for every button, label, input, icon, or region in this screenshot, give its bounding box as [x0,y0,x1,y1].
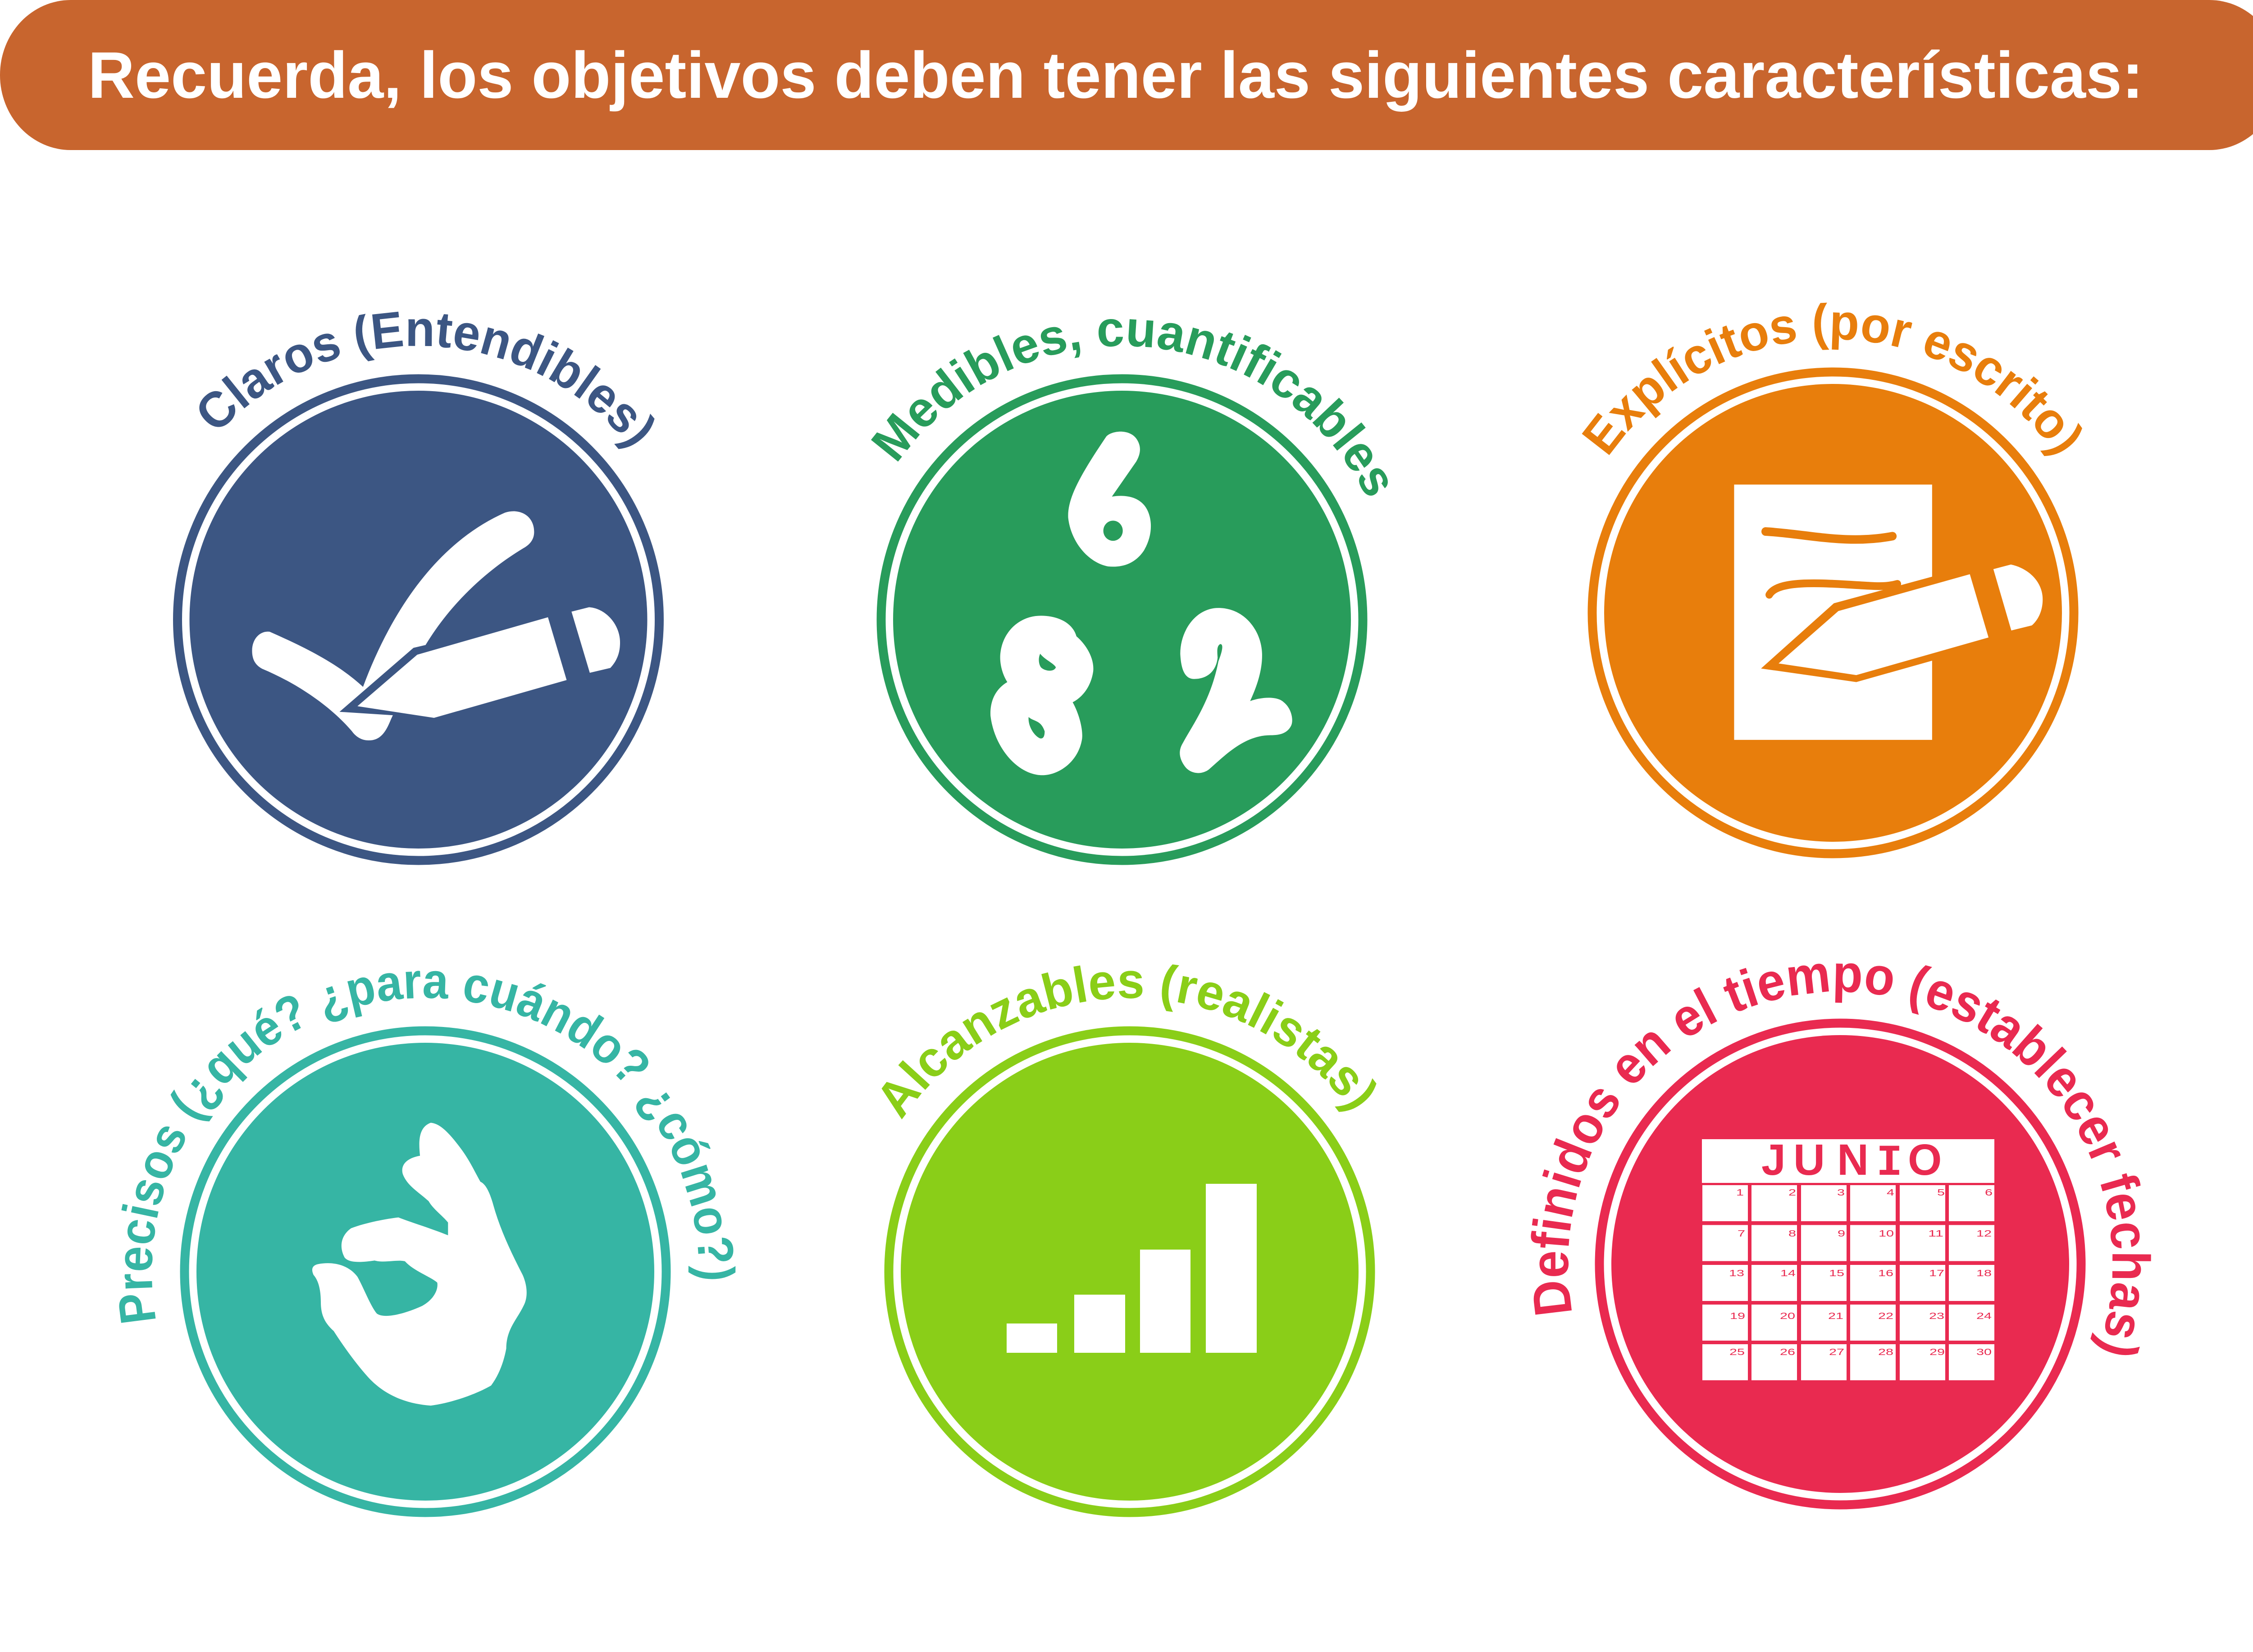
title banner: Recuerda, los objetivos deben tener las siguientes características: [88,38,2144,112]
icon: calendar june: I [1876,1139,1902,1188]
icon: calendar june: 7 [1738,1229,1745,1239]
icon: calendar june: 26 [1780,1347,1795,1357]
curved heading: medibles: Medibles, cuantificables [858,175,1432,709]
panel: explicitos [1569,169,2107,854]
icon: calendar june: 8 [1788,1229,1796,1239]
icon: calendar june: J [1761,1135,1786,1184]
curved heading: claros: Claros (Entendibles) [182,168,670,653]
icon: calendar june: 10 [1879,1229,1894,1239]
curved heading: explicitos: Explícitos (por escrito) [1569,169,2107,677]
badge circle: precisos [185,1031,666,1512]
icon: calendar june: 28 [1878,1347,1893,1357]
icon: hand pinching [312,1123,527,1406]
curved heading: precisos: Precisos (¿qué? ¿para cuándo? ¿cómo?) [53,899,752,1396]
icon: calendar june: 6 [1985,1188,1993,1198]
icon: calendar june: 30 [1976,1347,1992,1357]
panel: medibles [858,175,1432,860]
badge circle: medibles [881,379,1363,861]
panel: definidos [1467,890,2183,1505]
icon: calendar june: 5 [1937,1188,1945,1198]
icon: calendar june: 3 [1837,1188,1845,1198]
icon: calendar june: 29 [1929,1347,1945,1357]
icon: calendar june: U [1793,1135,1825,1184]
icon: numbers 6 8 2 [990,432,1292,775]
panel: claros [178,168,670,861]
icon: calendar june: 2 [1788,1188,1796,1198]
icon: calendar june [1702,1135,1994,1380]
icon: calendar june: 14 [1780,1269,1796,1278]
curved heading: definidos: Definidos en el tiempo (establecer fechas) [1467,890,2183,1474]
icon: calendar june: 23 [1929,1311,1944,1321]
icon: calendar june: 1 [1736,1188,1744,1198]
badge circle: claros [178,379,659,861]
icon: calendar june: N [1837,1135,1869,1184]
icon: calendar june: 24 [1976,1311,1992,1321]
badge circle: explicitos [1592,372,2074,853]
panel: precisos [53,899,752,1512]
icon: calendar june: 27 [1829,1347,1844,1357]
icon: calendar june: 25 [1729,1347,1745,1357]
curved heading: alcanzables: Alcanzables (realistas) [863,829,1401,1335]
icon: calendar june: 4 [1887,1188,1894,1198]
icon: calendar june: 9 [1838,1229,1845,1239]
icon: calendar june: 18 [1976,1269,1992,1278]
icon: calendar june: 15 [1829,1269,1844,1278]
icon: check mark and pencil [252,511,620,740]
badge circle: alcanzables [889,1031,1371,1512]
icon: calendar june: 11 [1928,1229,1943,1239]
icon: calendar june: 16 [1878,1269,1893,1278]
icon: calendar june: 19 [1730,1311,1745,1321]
icon: calendar june: 17 [1929,1269,1944,1278]
title banner [0,0,2253,150]
badge circle: definidos [1600,1023,2081,1505]
icon: calendar june: 22 [1878,1311,1893,1321]
icon: calendar june: 21 [1828,1311,1843,1321]
icon: calendar june: 13 [1729,1269,1744,1278]
icon: calendar june: O [1908,1135,1942,1184]
icon: calendar june: 12 [1976,1229,1992,1239]
icon: rising bars [1007,1184,1257,1353]
panel: alcanzables [863,829,1401,1512]
icon: paper and pencil [1734,484,2043,740]
icon: calendar june: 20 [1780,1311,1795,1321]
